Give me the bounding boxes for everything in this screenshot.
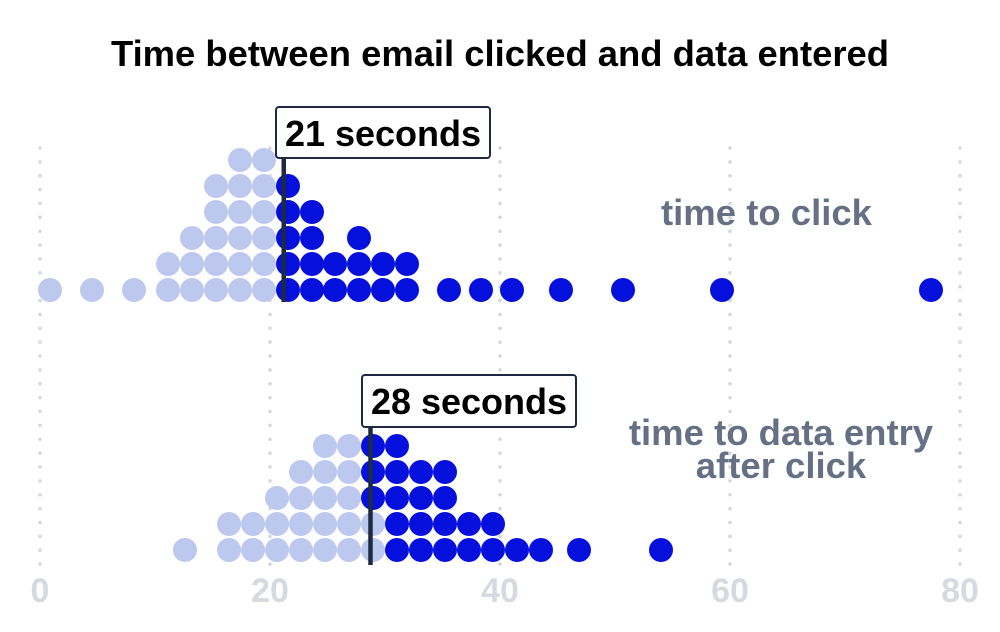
x axis labels: 40: [481, 572, 519, 610]
dot plot: time to click: [38, 148, 943, 302]
x axis labels: 80: [941, 572, 979, 610]
x axis labels: 20: [251, 572, 289, 610]
dots above median: time to click: [276, 174, 943, 302]
x axis labels: 60: [711, 572, 749, 610]
median marker: 21 seconds: [276, 107, 490, 302]
median marker: 21 seconds: 21 seconds: [285, 113, 481, 154]
series label: time to click: time to click: [661, 192, 873, 233]
x axis labels: 0: [31, 572, 49, 610]
series label: time to data entry after click: after click: [696, 445, 867, 486]
dots above median: time to data entry: [361, 434, 673, 562]
dots below median: time to click: [38, 148, 276, 302]
title: Time between email clicked and data entered: [111, 33, 889, 74]
median marker: 28 seconds: [362, 375, 576, 565]
x axis labels: [31, 572, 979, 610]
median marker: 28 seconds: 28 seconds: [371, 381, 567, 422]
dot plot: time to data entry: [173, 434, 673, 562]
dots below median: time to data entry: [173, 434, 385, 562]
series label: time to data entry after click: time to data entry: [629, 412, 934, 453]
